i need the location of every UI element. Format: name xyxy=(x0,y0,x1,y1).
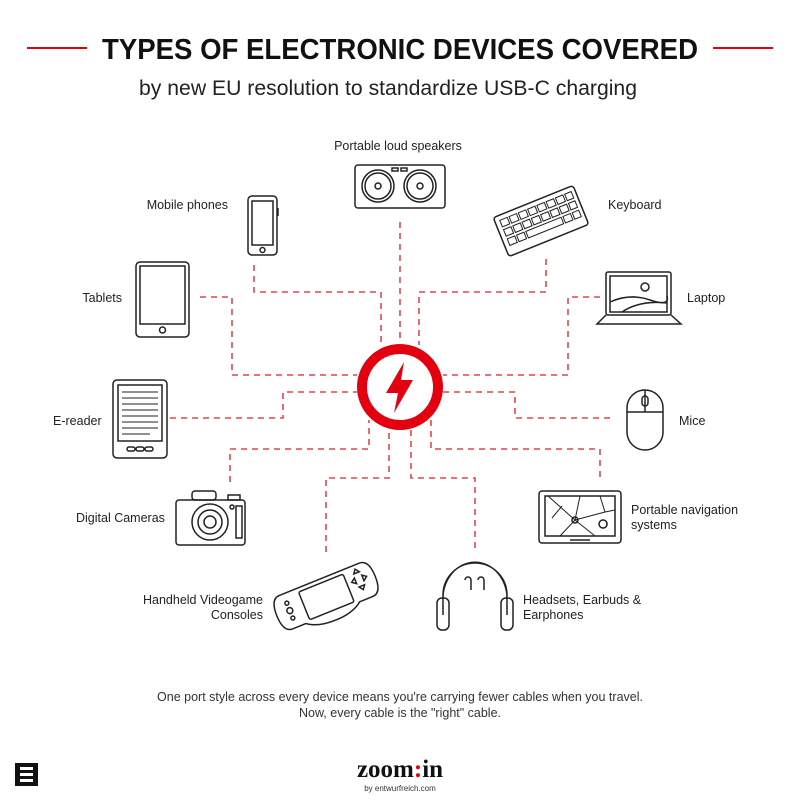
label: speakers: Portable loud speakers xyxy=(334,139,462,153)
label: tablets: Tablets xyxy=(82,291,122,305)
icon: e-reader xyxy=(113,380,167,458)
label: headsets: Earphones xyxy=(523,608,583,622)
label: navigation: systems xyxy=(631,518,677,532)
label: digital cameras: Digital Cameras xyxy=(76,511,165,525)
logo: zoom:in: zoom:in xyxy=(357,756,443,783)
icon: center charging bolt xyxy=(362,349,438,425)
connector lines xyxy=(170,222,610,552)
label: e-reader: E-reader xyxy=(53,414,102,428)
device icons xyxy=(113,165,681,640)
logo: zoom:in: by entwurfreich.com xyxy=(364,784,436,793)
icon: headset xyxy=(437,562,513,630)
label: navigation: Portable navigation xyxy=(631,503,738,517)
icon: laptop xyxy=(597,272,681,324)
subtitle: by new EU resolution to standardize USB-C charging xyxy=(139,77,637,100)
label: mobile phones: Mobile phones xyxy=(147,198,228,212)
icon: camera xyxy=(176,491,245,545)
label: keyboard: Keyboard xyxy=(608,198,662,212)
icon: navigation xyxy=(539,491,621,543)
icon: mouse xyxy=(627,390,663,450)
logo: left E mark xyxy=(15,763,38,786)
icon: phone xyxy=(248,196,278,255)
label: headsets: Headsets, Earbuds & xyxy=(523,593,641,607)
label: handheld consoles: Handheld Videogame xyxy=(143,593,263,607)
footer text: One port style across every device means you're carrying fewer cables when you travel. xyxy=(157,690,643,704)
icon: handheld console xyxy=(270,559,385,640)
label: mice: Mice xyxy=(679,414,705,428)
labels xyxy=(53,139,738,622)
footer text: Now, every cable is the "right" cable. xyxy=(299,706,501,720)
title: TYPES OF ELECTRONIC DEVICES COVERED xyxy=(102,34,698,66)
label: handheld consoles: Consoles xyxy=(211,608,263,622)
icon: keyboard xyxy=(493,185,589,257)
icon: speakers xyxy=(355,165,445,208)
icon: tablet xyxy=(136,262,189,337)
label: laptop: Laptop xyxy=(687,291,725,305)
